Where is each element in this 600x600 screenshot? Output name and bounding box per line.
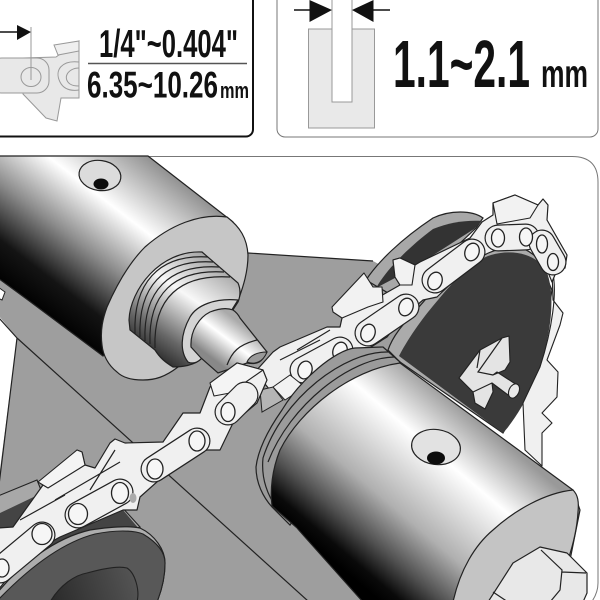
- saw chain lower run: [0, 363, 267, 590]
- shaft neck: [191, 309, 267, 373]
- mounting plate: [0, 253, 445, 600]
- icon: chain link sketch: [0, 41, 79, 121]
- upper grinding cylinder: [0, 156, 267, 380]
- end face: [453, 490, 578, 600]
- cutter tooth lower-left: [38, 450, 85, 488]
- saw chain upper run: [255, 195, 567, 392]
- threaded shaft: [129, 252, 240, 367]
- fraction line: [88, 62, 247, 64]
- white corner left of plate: [0, 287, 5, 300]
- cutter tooth centre-left: [210, 363, 263, 396]
- disc centre hole: [50, 567, 138, 600]
- text: pitch in millimetres: 6.35~10.26: [87, 64, 218, 106]
- cutter tooth small: [393, 258, 415, 285]
- panel: chain pitch: [0, 0, 253, 136]
- end face: [101, 216, 248, 380]
- chain pin block: [260, 375, 305, 412]
- cutter tooth centre: [332, 273, 383, 318]
- upper links: [280, 228, 558, 381]
- text: pitch in millimetres: mm: [220, 78, 249, 103]
- right grinding disc: [366, 212, 552, 433]
- panel: main illustration: [0, 156, 598, 600]
- small cutter on disc: [459, 336, 522, 409]
- panel: chain gauge: [277, 0, 598, 137]
- lower grinding cylinder: [256, 347, 587, 600]
- lower-left grinding disc: [0, 480, 165, 600]
- hex nut: [488, 547, 587, 600]
- cutter tooth at upper right: [493, 195, 538, 224]
- arrow: pitch dimension: [0, 25, 31, 80]
- oil hole: [77, 158, 123, 193]
- lower links: [0, 395, 245, 577]
- right side of chain: [523, 270, 563, 466]
- oil hole: [409, 426, 463, 468]
- washer: [182, 300, 238, 363]
- icon: slot diagram: [308, 0, 374, 128]
- flange rings: [256, 347, 400, 525]
- arrow: gauge dimension: [294, 0, 390, 22]
- small rivet stub: [130, 493, 136, 503]
- text: pitch in inches: 1/4"~0.404": [99, 23, 238, 66]
